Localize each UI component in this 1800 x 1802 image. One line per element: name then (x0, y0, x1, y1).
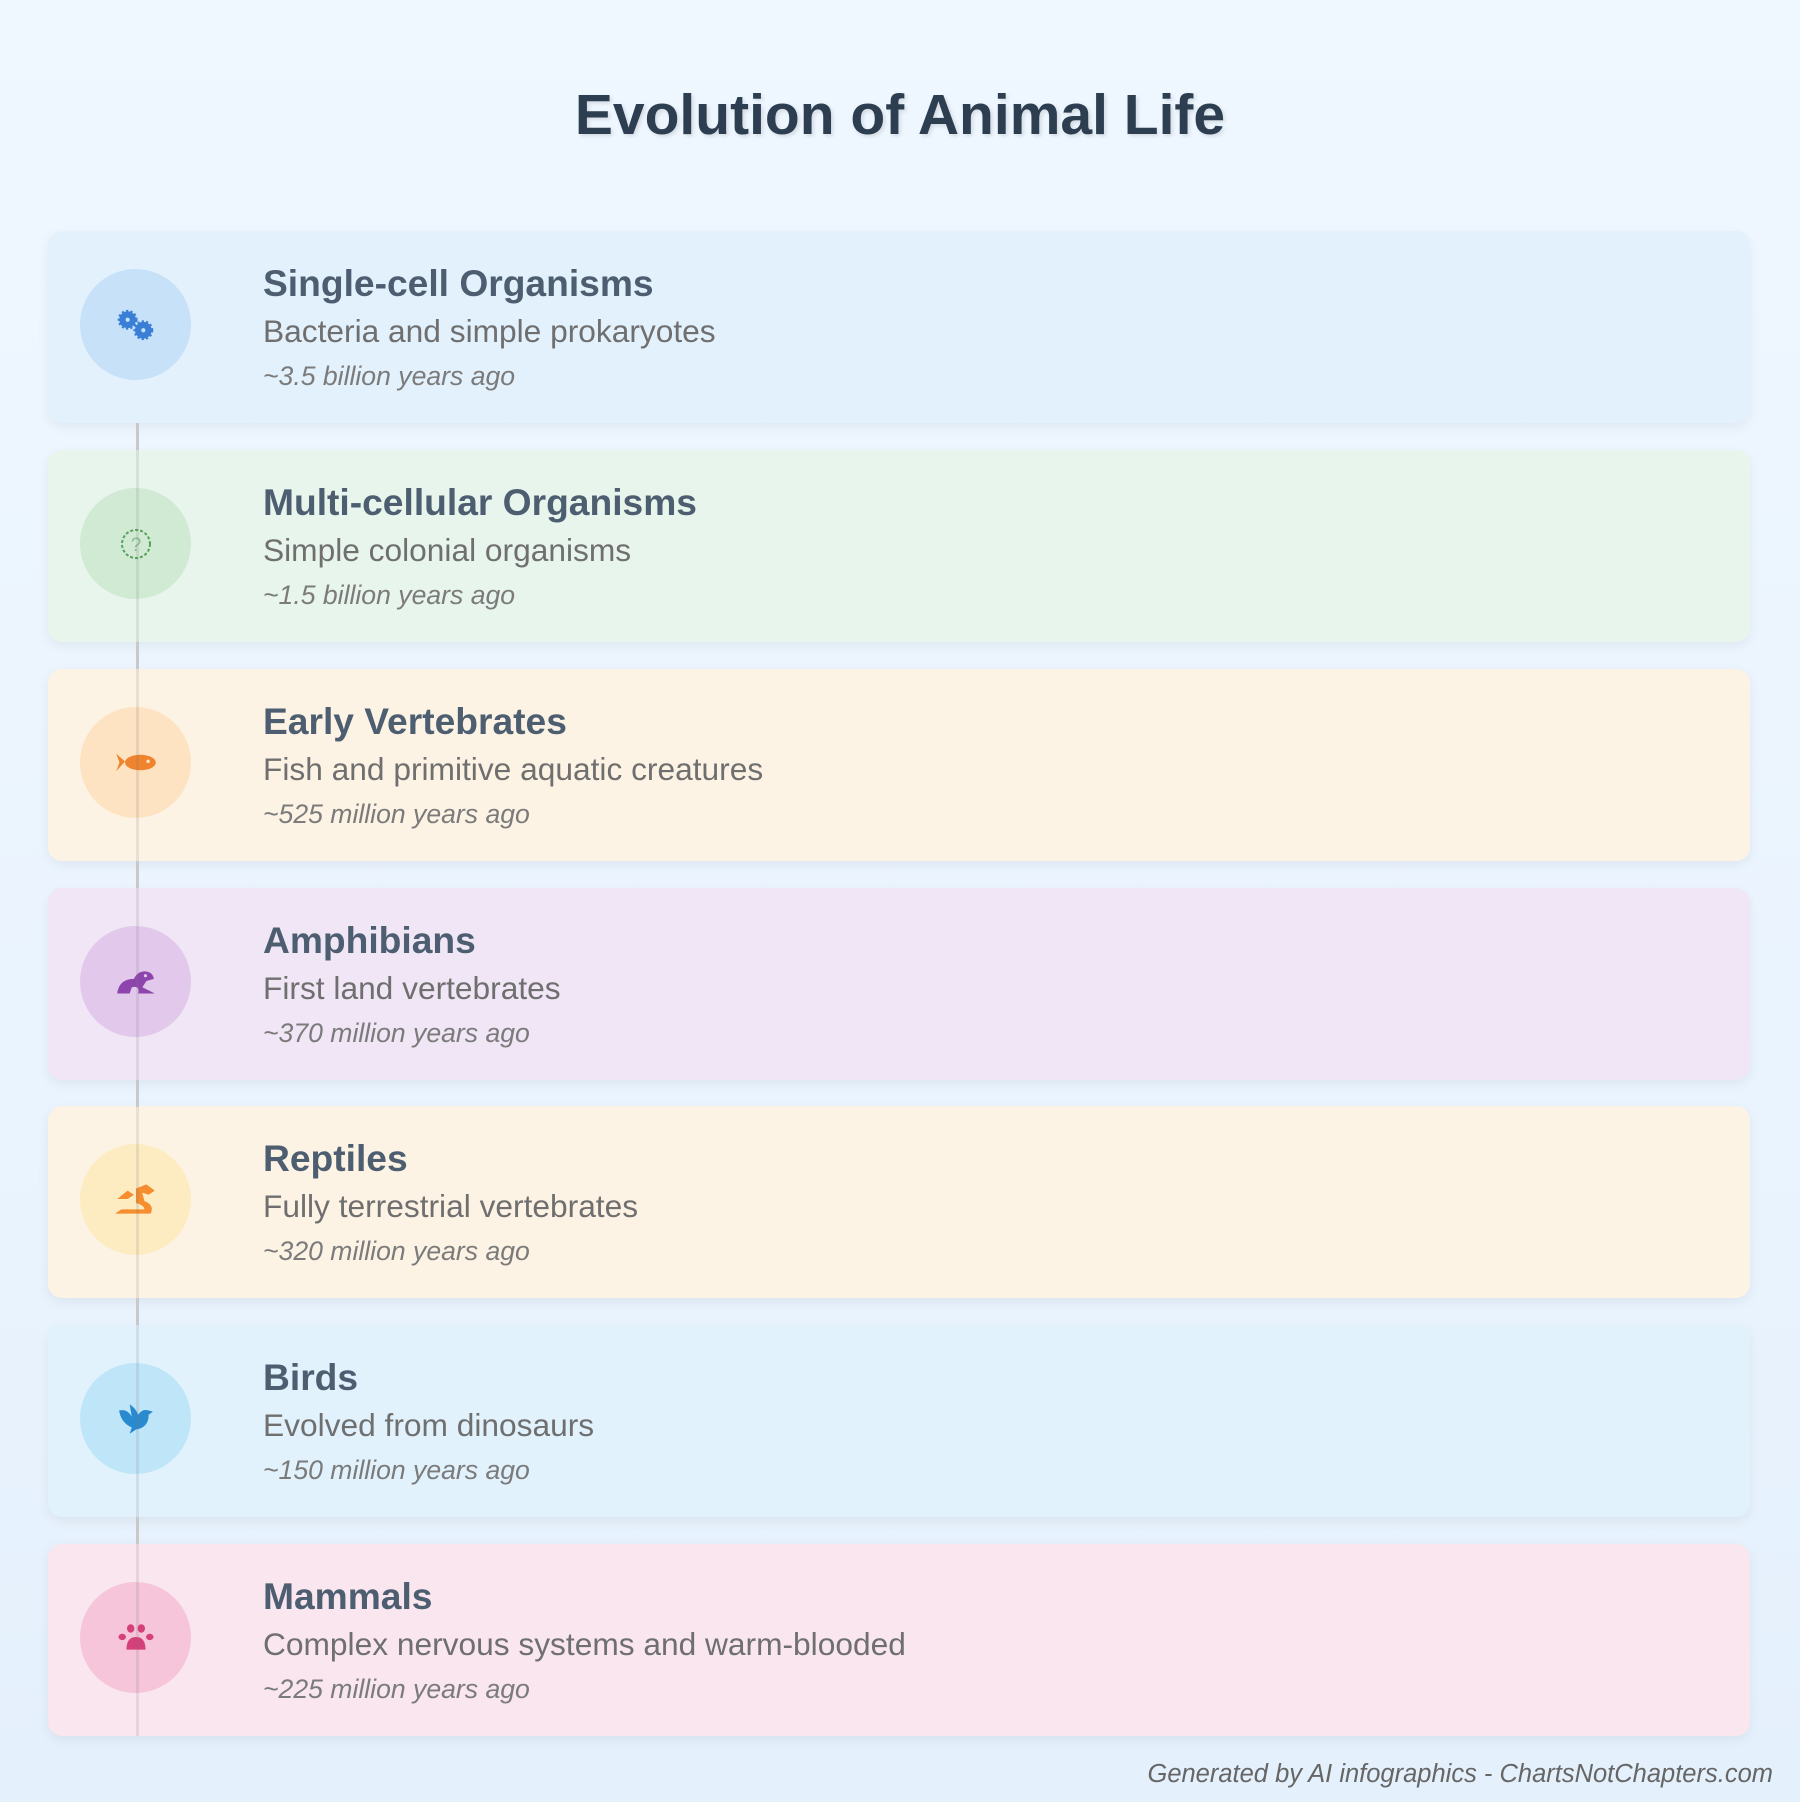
icon: dragon (80, 1144, 191, 1255)
icon: paw (80, 1582, 191, 1693)
panel: mammals (48, 1544, 1750, 1736)
date: ~150 million years ago (263, 1455, 530, 1485)
panel: multi-cellular (48, 450, 1750, 642)
description: Evolved from dinosaurs (263, 1407, 594, 1443)
heading: Birds (263, 1356, 358, 1398)
date: ~525 million years ago (263, 799, 530, 829)
date: ~370 million years ago (263, 1018, 530, 1048)
heading: Single-cell Organisms (263, 262, 654, 304)
description: First land vertebrates (263, 970, 561, 1006)
icon: bacteria (80, 269, 191, 380)
description: Fully terrestrial vertebrates (263, 1188, 638, 1224)
title: Evolution of Animal Life (575, 83, 1225, 147)
description: Complex nervous systems and warm-blooded (263, 1626, 906, 1662)
date: ~225 million years ago (263, 1674, 530, 1704)
panel: birds (48, 1325, 1750, 1517)
heading: Early Vertebrates (263, 700, 567, 742)
panel: reptiles (48, 1106, 1750, 1298)
heading: Amphibians (263, 919, 476, 961)
heading: Mammals (263, 1575, 432, 1617)
icon: question (80, 488, 191, 599)
description: Bacteria and simple prokaryotes (263, 313, 716, 349)
icon: question: ? (130, 534, 141, 556)
icon: fish (80, 707, 191, 818)
date: ~320 million years ago (263, 1236, 530, 1266)
panel: amphibians (48, 888, 1750, 1080)
date: ~1.5 billion years ago (263, 580, 515, 610)
footer: Generated by AI infographics - ChartsNotChapters.com (1147, 1760, 1773, 1788)
timeline connector (136, 423, 139, 1736)
heading: Multi-cellular Organisms (263, 481, 697, 523)
icon: bird (80, 1363, 191, 1474)
date: ~3.5 billion years ago (263, 361, 515, 391)
description: Simple colonial organisms (263, 532, 631, 568)
panel: single-cell (48, 231, 1750, 423)
icon: frog (80, 926, 191, 1037)
description: Fish and primitive aquatic creatures (263, 751, 763, 787)
heading: Reptiles (263, 1137, 408, 1179)
panel: early vertebrates (48, 669, 1750, 861)
